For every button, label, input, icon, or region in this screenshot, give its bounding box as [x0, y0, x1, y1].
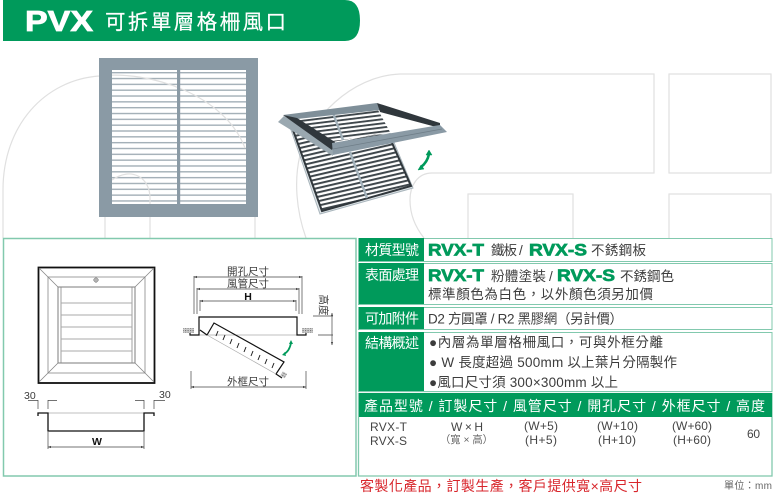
panel: accessories row: D2 方圓罩 / R2 黑膠網（另計價）: [428, 312, 623, 326]
drawing: height section with hinged panel: 高度: [317, 294, 330, 316]
panel: structure row: ●內層為單層格柵風口，可與外框分離: [429, 335, 663, 350]
panel: structure row: ●風口尺寸須 300×300mm 以上: [429, 375, 618, 390]
drawing: width section with dimensions: [24, 389, 171, 449]
panel: accessories row: 可加附件: [365, 310, 419, 326]
drawing: height section with hinged panel: [183, 265, 333, 389]
panel: surface treatment row: RVX-T: [428, 267, 484, 285]
panel: drawings frame: [4, 238, 356, 476]
title banner: [3, 0, 360, 41]
product photo: louver grille front view: [3, 58, 771, 238]
panel: surface treatment row: 不銹鋼色: [620, 268, 674, 284]
drawing: height section with hinged panel: 風管尺寸: [227, 277, 269, 290]
panel: surface treatment row: 表面處理: [365, 267, 419, 283]
panel: material row: 鐵板: [491, 242, 518, 258]
panel: material row: 材質型號: [365, 242, 419, 258]
drawing: height section with hinged panel: H: [244, 291, 252, 303]
panel: specification table: RVX-T: [370, 420, 408, 434]
panel: material row: 不銹鋼板: [591, 243, 646, 258]
panel: specification table: （寬 × 高）: [440, 433, 493, 446]
panel: specification table: (H+5): [525, 433, 557, 447]
drawing: width section with dimensions: 30: [159, 389, 171, 401]
title banner: PVX: [25, 6, 94, 38]
panel: specification table: (H+10): [598, 433, 636, 447]
panel: material row: [358, 238, 772, 262]
panel: specification table: W × H: [451, 420, 483, 434]
panel: structure row: 結構概述: [365, 335, 419, 351]
drawing: height section with hinged panel: 外框尺寸: [227, 375, 269, 388]
panel: material row: RVX-S: [529, 242, 587, 260]
panel: material row: /: [519, 243, 523, 258]
panel: specification table: 產品型號 / 訂製尺寸 / 風管尺寸 / 開孔尺寸 / 外框尺寸 / 高度: [364, 398, 765, 414]
product photo: exploded grille with hinged panel: [278, 103, 447, 214]
unit note: 單位：mm: [724, 479, 772, 492]
panel: specification table: (W+5): [524, 419, 558, 433]
panel: surface treatment row: /: [549, 269, 553, 284]
panel: surface treatment row: RVX-S: [557, 267, 615, 285]
title banner: 可拆單層格柵風口: [105, 11, 286, 34]
panel: surface treatment row: 粉體塗裝: [491, 268, 546, 284]
panel: surface treatment row: [358, 263, 772, 304]
panel: surface treatment row: 標準顏色為白色，以外顏色須另加價: [428, 286, 654, 302]
icon: green rotate arrow: [418, 150, 432, 170]
footnote: custom order: 客製化產品，訂製生產，客戶提供寬×高尺寸: [360, 478, 642, 494]
panel: accessories row: [358, 307, 772, 330]
drawing: width section with dimensions: W: [92, 436, 102, 448]
panel: specification table: (W+60): [672, 419, 712, 433]
drawing: height section with hinged panel: 開孔尺寸: [227, 265, 269, 278]
panel: structure row: ● W 長度超過 500mm 以上葉片分隔製作: [429, 355, 677, 370]
panel: specification table: 60: [747, 427, 760, 441]
panel: structure row: [358, 332, 772, 392]
drawing: front view: [38, 268, 154, 383]
panel: specification table: RVX-S: [370, 434, 407, 448]
panel: material row: RVX-T: [428, 242, 484, 260]
panel: specification table: (W+10): [597, 419, 638, 433]
drawing: width section with dimensions: 30: [24, 390, 36, 402]
panel: specification table: (H+60): [673, 433, 711, 447]
panel: specification table: [358, 393, 772, 476]
